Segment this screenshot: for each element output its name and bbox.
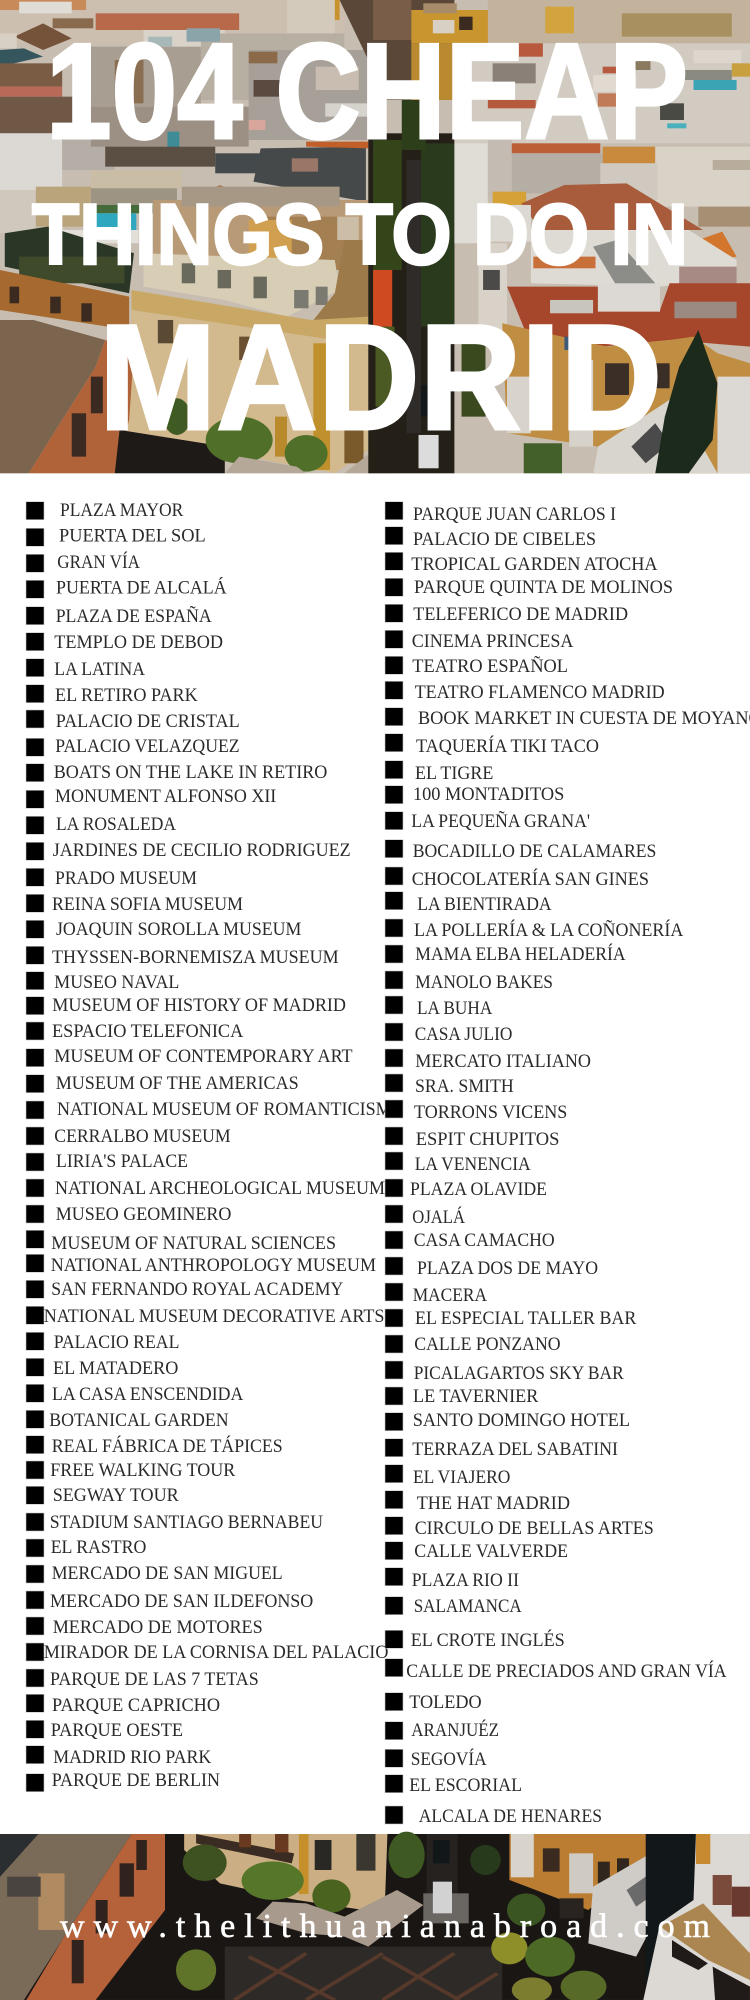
item: MUSEUM OF THE AMERICAS bbox=[56, 1073, 299, 1094]
item: PUERTA DE ALCALÁ bbox=[56, 576, 227, 598]
item: TOLEDO bbox=[409, 1692, 482, 1713]
item: EL RASTRO bbox=[51, 1537, 146, 1558]
item: PARQUE JUAN CARLOS I bbox=[413, 504, 616, 525]
item: NATIONAL ARCHEOLOGICAL MUSEUM bbox=[55, 1178, 385, 1199]
item: LA ROSALEDA bbox=[56, 814, 176, 835]
title line: MADRID: MADRID bbox=[99, 293, 662, 461]
item: REINA SOFIA MUSEUM bbox=[52, 894, 243, 915]
item: REAL FÁBRICA DE TÁPICES bbox=[52, 1435, 283, 1457]
item: ESPACIO TELEFONICA bbox=[52, 1021, 244, 1042]
item: PLAZA RIO II bbox=[412, 1570, 519, 1591]
item: LA PEQUEÑA GRANA' bbox=[411, 810, 590, 832]
item: NATIONAL ANTHROPOLOGY MUSEUM bbox=[51, 1255, 376, 1276]
item: MAMA ELBA HELADERÍA bbox=[415, 943, 626, 965]
item: PALACIO DE CIBELES bbox=[413, 529, 596, 550]
item: TROPICAL GARDEN ATOCHA bbox=[411, 554, 658, 575]
item: MUSEO NAVAL bbox=[54, 972, 179, 993]
footer photo: plaza and street from above bbox=[0, 1832, 750, 2000]
item: EL TIGRE bbox=[415, 763, 493, 784]
item: PARQUE OESTE bbox=[51, 1720, 183, 1741]
item: CALLE DE PRECIADOS AND GRAN VÍA bbox=[406, 1660, 727, 1682]
item: CINEMA PRINCESA bbox=[412, 631, 574, 652]
item: MUSEO GEOMINERO bbox=[56, 1204, 231, 1225]
item: STADIUM SANTIAGO BERNABEU bbox=[50, 1512, 323, 1533]
item: PUERTA DEL SOL bbox=[59, 525, 206, 546]
item: MERCADO DE SAN ILDEFONSO bbox=[50, 1591, 313, 1612]
item: EL CROTE INGLÉS bbox=[411, 1629, 565, 1651]
item: PLAZA DOS DE MAYO bbox=[417, 1258, 598, 1279]
item: BOTANICAL GARDEN bbox=[49, 1410, 229, 1431]
item: LA LATINA bbox=[54, 659, 145, 680]
item: EL RETIRO PARK bbox=[55, 685, 198, 706]
item: PALACIO VELAZQUEZ bbox=[55, 736, 240, 757]
list: right column bbox=[385, 502, 750, 1827]
item: MUSEUM OF CONTEMPORARY ART bbox=[54, 1046, 353, 1067]
item bbox=[385, 761, 493, 784]
item: NATIONAL MUSEUM OF ROMANTICISM bbox=[57, 1099, 392, 1120]
item: SALAMANCA bbox=[414, 1596, 522, 1617]
item: CIRCULO DE BELLAS ARTES bbox=[415, 1518, 654, 1539]
item: OJALÁ bbox=[412, 1206, 465, 1228]
item bbox=[385, 1568, 519, 1591]
item: ALCALA DE HENARES bbox=[419, 1806, 602, 1827]
item: PLAZA DE ESPAÑA bbox=[56, 605, 212, 627]
item: LIRIA'S PALACE bbox=[56, 1151, 188, 1172]
item: NATIONAL MUSEUM DECORATIVE ARTS bbox=[44, 1306, 384, 1327]
item: LE TAVERNIER bbox=[413, 1386, 539, 1407]
item: SEGWAY TOUR bbox=[53, 1485, 179, 1506]
item: PICALAGARTOS SKY BAR bbox=[414, 1363, 624, 1384]
item bbox=[385, 1152, 531, 1175]
header photo: aerial view of city rooftops bbox=[0, 0, 750, 473]
item bbox=[385, 892, 552, 915]
item: PLAZA OLAVIDE bbox=[410, 1179, 547, 1200]
item: MANOLO BAKES bbox=[415, 972, 553, 993]
item: MADRID RIO PARK bbox=[53, 1747, 212, 1768]
item: PARQUE QUINTA DE MOLINOS bbox=[414, 577, 673, 598]
item: MERCADO DE MOTORES bbox=[53, 1617, 263, 1638]
item: LA BUHA bbox=[417, 998, 493, 1019]
item: PARQUE CAPRICHO bbox=[52, 1695, 220, 1716]
item: EL ESCORIAL bbox=[409, 1775, 522, 1796]
item: CASA JULIO bbox=[415, 1024, 512, 1045]
item: TELEFERICO DE MADRID bbox=[413, 604, 628, 625]
item: CERRALBO MUSEUM bbox=[54, 1126, 231, 1147]
item: ARANJUÉZ bbox=[411, 1719, 499, 1741]
item: TAQUERÍA TIKI TACO bbox=[416, 735, 599, 757]
item: PRADO MUSEUM bbox=[55, 868, 197, 889]
item: EL MATADERO bbox=[53, 1358, 178, 1379]
item: MERCADO DE SAN MIGUEL bbox=[52, 1563, 283, 1584]
item: BOCADILLO DE CALAMARES bbox=[413, 841, 656, 862]
item: PALACIO REAL bbox=[54, 1332, 179, 1353]
item: SANTO DOMINGO HOTEL bbox=[413, 1410, 630, 1431]
item bbox=[385, 1719, 499, 1741]
item: PLAZA MAYOR bbox=[60, 500, 184, 521]
item: LA CASA ENSCENDIDA bbox=[52, 1384, 244, 1405]
item bbox=[385, 1748, 487, 1770]
item: ESPIT CHUPITOS bbox=[416, 1129, 559, 1150]
item: TORRONS VICENS bbox=[414, 1102, 567, 1123]
item bbox=[385, 1465, 510, 1488]
item: FREE WALKING TOUR bbox=[50, 1460, 236, 1481]
item bbox=[385, 1205, 465, 1228]
item bbox=[385, 1283, 487, 1306]
item: 100 MONTADITOS bbox=[413, 784, 564, 805]
item: PALACIO DE CRISTAL bbox=[56, 711, 240, 732]
item: MERCATO ITALIANO bbox=[415, 1051, 591, 1072]
item: JARDINES DE CECILIO RODRIGUEZ bbox=[53, 840, 351, 861]
item bbox=[385, 1023, 512, 1045]
item: SRA. SMITH bbox=[415, 1076, 514, 1097]
item: MONUMENT ALFONSO XII bbox=[55, 786, 276, 807]
item: SAN FERNANDO ROYAL ACADEMY bbox=[51, 1279, 344, 1300]
item: THE HAT MADRID bbox=[417, 1493, 570, 1514]
item: GRAN VÍA bbox=[57, 551, 140, 573]
item: LA POLLERÍA & LA COÑONERÍA bbox=[414, 919, 684, 941]
item: EL ESPECIAL TALLER BAR bbox=[415, 1308, 637, 1329]
item: JOAQUIN SOROLLA MUSEUM bbox=[56, 919, 301, 940]
title: 104 cheap things to do in madrid bbox=[32, 15, 688, 461]
item: CALLE VALVERDE bbox=[414, 1541, 568, 1562]
item: CASA CAMACHO bbox=[414, 1230, 555, 1251]
item: EL VIAJERO bbox=[413, 1467, 510, 1488]
item: BOATS ON THE LAKE IN RETIRO bbox=[54, 762, 327, 783]
item bbox=[26, 551, 140, 573]
item: LA BIENTIRADA bbox=[417, 894, 552, 915]
item bbox=[385, 996, 493, 1019]
footer website url: www.thelithuanianabroad.com bbox=[60, 1908, 710, 1945]
item: CHOCOLATERÍA SAN GINES bbox=[412, 868, 649, 890]
item: SEGOVÍA bbox=[411, 1748, 487, 1770]
item: PARQUE DE LAS 7 TETAS bbox=[50, 1669, 259, 1690]
item: MUSEUM OF HISTORY OF MADRID bbox=[52, 995, 346, 1016]
item: MUSEUM OF NATURAL SCIENCES bbox=[51, 1233, 336, 1254]
item: TEATRO FLAMENCO MADRID bbox=[415, 682, 665, 703]
title line: THINGS TO DO IN: THINGS TO DO IN bbox=[32, 187, 688, 283]
item: THYSSEN-BORNEMISZA MUSEUM bbox=[52, 947, 339, 968]
item: CALLE PONZANO bbox=[414, 1334, 561, 1355]
item: MACERA bbox=[413, 1285, 487, 1306]
item: LA VENENCIA bbox=[415, 1154, 531, 1175]
list: left column bbox=[26, 500, 392, 1792]
item: TEATRO ESPAÑOL bbox=[412, 655, 568, 677]
item: MIRADOR DE LA CORNISA DEL PALACIO bbox=[44, 1642, 388, 1663]
item: PARQUE DE BERLIN bbox=[52, 1770, 220, 1791]
item: TERRAZA DEL SABATINI bbox=[412, 1439, 618, 1460]
item bbox=[385, 1074, 514, 1097]
item: TEMPLO DE DEBOD bbox=[54, 632, 223, 653]
